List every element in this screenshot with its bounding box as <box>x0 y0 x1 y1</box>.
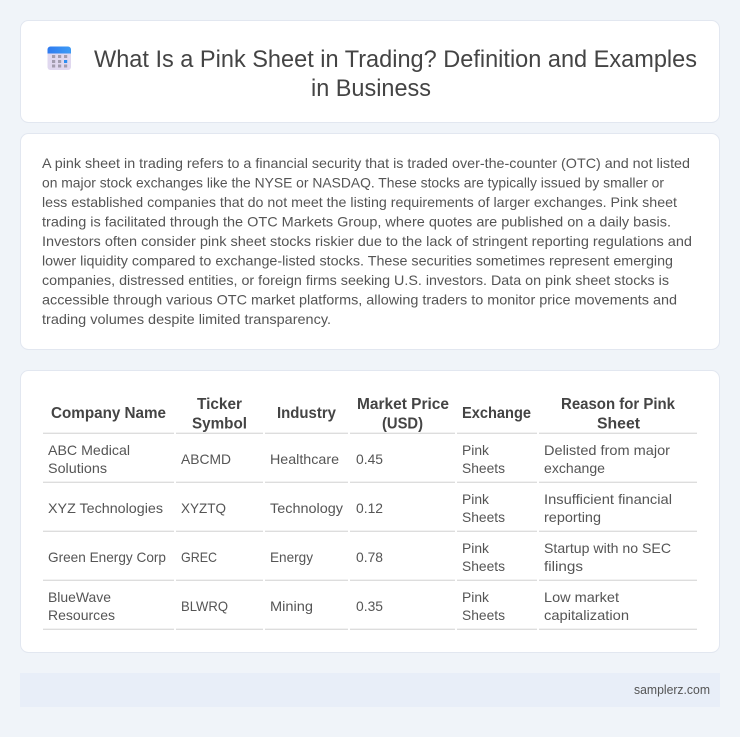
table row: Green Energy Corp: GREC <box>181 549 217 565</box>
table row: BlueWave Resources <box>48 589 629 623</box>
table row: ABC Medical Solutions: Pink <box>462 442 490 458</box>
table row: Green Energy Corp: Green Energy Corp <box>48 549 166 565</box>
table row: BlueWave Resources: Sheets <box>462 607 505 623</box>
text block: definition paragraph: trading volumes despite limited transparency. <box>42 311 331 327</box>
text block: definition paragraph: on major stock exchanges like the NYSE or NASDAQ. These stocks are typically issued by smaller or <box>42 174 664 190</box>
table header: (USD) <box>382 416 423 432</box>
table row: BlueWave Resources: Mining <box>270 598 313 614</box>
table row: BlueWave Resources: Low market <box>544 589 619 605</box>
table header: Company Name <box>51 405 166 422</box>
table header: Sheet <box>597 416 641 432</box>
table row: XYZ Technologies: 0.12 <box>356 500 383 516</box>
table row: ABC Medical Solutions: ABCMD <box>181 451 231 467</box>
table row: ABC Medical Solutions: ABC Medical <box>48 442 130 458</box>
table row: BlueWave Resources: BLWRQ <box>181 598 228 614</box>
table row: Green Energy Corp: 0.78 <box>356 549 383 565</box>
table row: Green Energy Corp: Pink <box>462 540 490 556</box>
text block: definition paragraph: A pink sheet in trading refers to a financial security that is traded over-the-counter (OTC) and not listed <box>42 155 690 171</box>
table header: Industry <box>277 405 336 422</box>
text block: definition paragraph: Investors often consider pink sheet stocks riskier due to the lack of stringent reporting regulations and <box>42 233 692 249</box>
footer <box>20 673 720 707</box>
table row: BlueWave Resources: BlueWave <box>48 589 111 605</box>
table row: Green Energy Corp <box>48 540 671 574</box>
table header: Exchange <box>462 405 531 422</box>
table row: BlueWave Resources: capitalization <box>544 607 629 623</box>
text block: definition paragraph: lower liquidity compared to exchange-listed stocks. These securities sometimes represent emerging <box>42 252 673 268</box>
footer: samplerz.com <box>634 683 710 697</box>
table row: XYZ Technologies: Sheets <box>462 509 505 525</box>
table row: BlueWave Resources: 0.35 <box>356 598 383 614</box>
panel: table <box>20 370 720 652</box>
table row: XYZ Technologies: Insufficient financial <box>544 491 672 507</box>
table row: XYZ Technologies: Pink <box>462 491 490 507</box>
table row: Green Energy Corp: Startup with no SEC <box>544 540 671 556</box>
table row: XYZ Technologies: XYZ Technologies <box>48 500 163 516</box>
title <box>94 46 697 102</box>
table row: ABC Medical Solutions: exchange <box>544 460 605 476</box>
text block: definition paragraph: less established companies that do not meet the listing requirements of larger exchanges. Pink sheet <box>42 194 677 210</box>
table row: ABC Medical Solutions: Sheets <box>462 460 505 476</box>
table row: Green Energy Corp: filings <box>544 558 583 574</box>
text block: definition paragraph <box>42 155 692 327</box>
table row: Green Energy Corp: Energy <box>270 549 313 565</box>
table row: ABC Medical Solutions: Healthcare <box>270 451 339 467</box>
table row: ABC Medical Solutions <box>48 442 670 476</box>
table header: Ticker <box>197 396 242 413</box>
table row: ABC Medical Solutions: 0.45 <box>356 451 383 467</box>
table row: BlueWave Resources: Resources <box>48 607 115 623</box>
panel: description <box>20 134 720 350</box>
table header: Reason for Pink <box>561 396 675 413</box>
icon: calendar <box>48 46 71 70</box>
text block: definition paragraph: trading is facilitated through the OTC Markets Group, where quotes are published on a daily basis. <box>42 214 671 230</box>
table header: Market Price <box>357 396 449 413</box>
title: What Is a Pink Sheet in Trading? Definition and Examples <box>94 46 697 73</box>
table row: XYZ Technologies: XYZTQ <box>181 500 226 516</box>
text block: definition paragraph: companies, distressed entities, or foreign firms seeking U.S. investors. Data on pink sheet stocks is <box>42 272 669 288</box>
title: in Business <box>311 75 431 102</box>
table header: Symbol <box>192 416 247 432</box>
table row: XYZ Technologies: Technology <box>270 500 343 516</box>
text block: definition paragraph: accessible through various OTC market platforms, allowing traders to monitor price movements and <box>42 292 677 308</box>
table row: ABC Medical Solutions: Delisted from major <box>544 442 670 458</box>
panel: title <box>20 20 720 122</box>
table row: BlueWave Resources: Pink <box>462 589 490 605</box>
table row: ABC Medical Solutions: Solutions <box>48 460 107 476</box>
table header <box>51 396 675 432</box>
table row: XYZ Technologies: reporting <box>544 509 601 525</box>
table row: Green Energy Corp: Sheets <box>462 558 505 574</box>
table row: XYZ Technologies <box>48 491 672 525</box>
